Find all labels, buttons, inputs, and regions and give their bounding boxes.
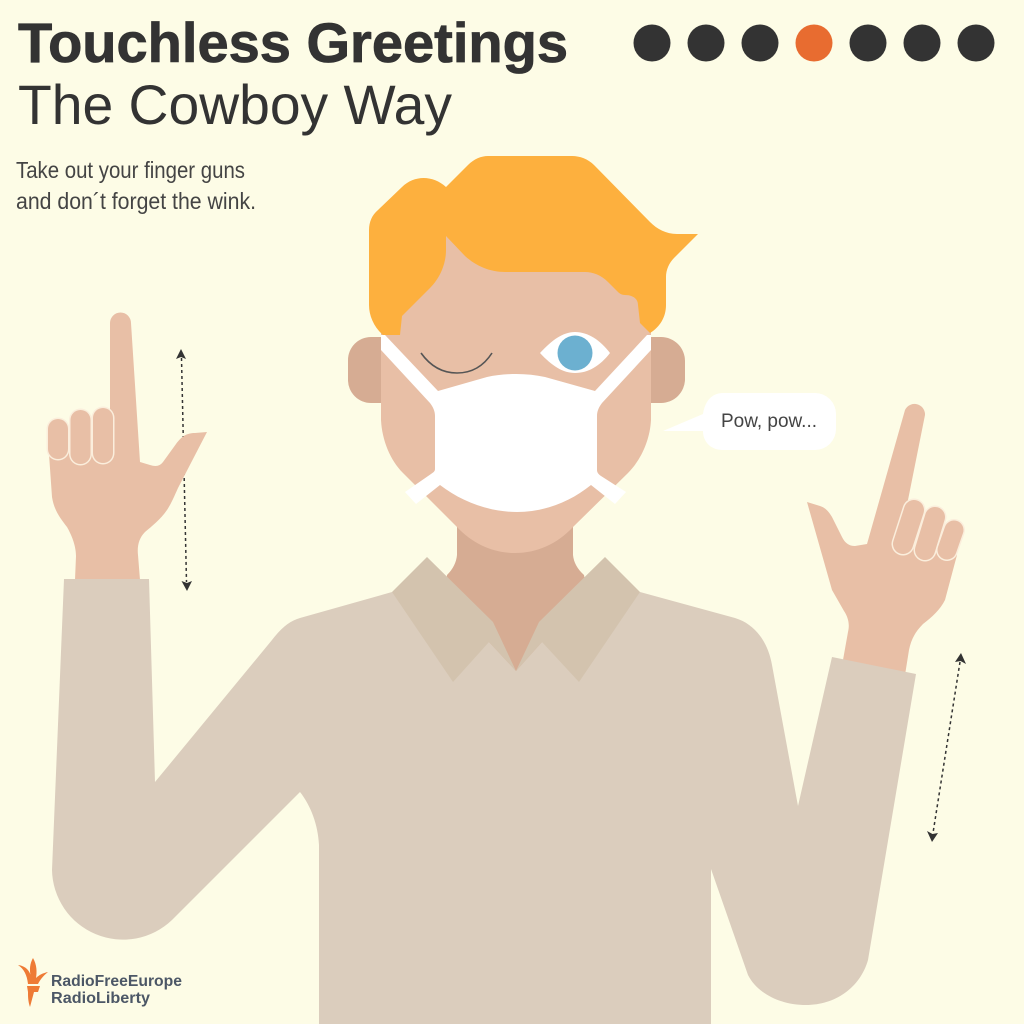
logo wordmark: RadioLiberty: [51, 990, 150, 1007]
speech bubble: [663, 393, 836, 450]
shirt: [52, 579, 916, 1024]
logo wordmark: RadioFreeEurope: [51, 973, 182, 990]
title: Touchless Greetings: [18, 11, 568, 74]
logo torch icon: [18, 958, 48, 1007]
intro text: and don´t forget the wink.: [16, 188, 256, 214]
title: [18, 11, 568, 136]
right hand: [807, 404, 957, 675]
hair: [369, 156, 698, 335]
intro text: Take out your finger guns: [16, 157, 245, 183]
right hand palm and index finger: [807, 404, 957, 675]
intro text: [16, 157, 256, 214]
progress dots: [634, 24, 994, 62]
left hand curled fingers: [58, 418, 103, 454]
logo wordmark: [51, 973, 182, 1007]
right hand curled fingers: [903, 510, 954, 550]
face: [381, 225, 651, 553]
face mask: [381, 335, 651, 512]
collar: [392, 557, 640, 682]
left hand: [48, 312, 207, 580]
speech bubble: Pow, pow...: [721, 411, 817, 432]
closed eye wink: [421, 353, 492, 373]
arrow: right hand motion: [927, 653, 966, 842]
logo: RFE/RL: [18, 958, 182, 1007]
ears: [348, 337, 685, 403]
title: The Cowboy Way: [18, 73, 452, 136]
left hand palm and index finger: [48, 312, 207, 580]
open eye: [540, 332, 610, 373]
arrow: left hand motion: [176, 349, 192, 591]
neck: [440, 515, 592, 672]
